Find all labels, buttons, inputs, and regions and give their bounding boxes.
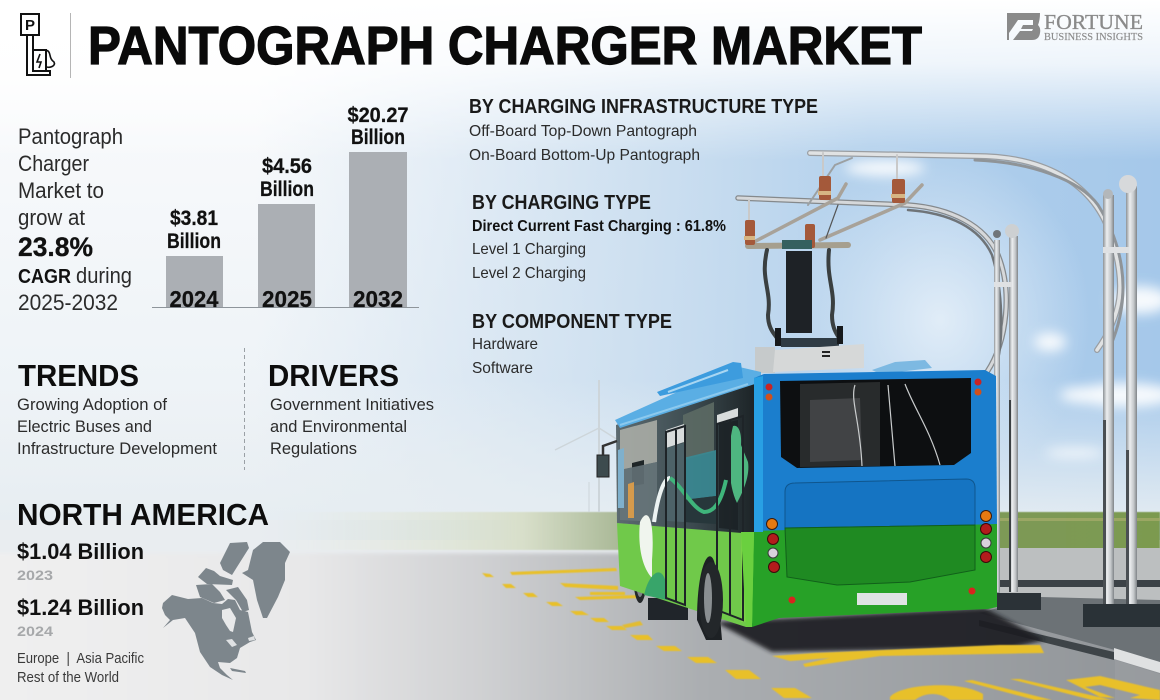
segment: charging infrastructure type: Off-Board Top-Down Pantograph: [469, 123, 697, 140]
tail lights: [766, 378, 992, 604]
title: PANTOGRAPH CHARGER MARKET: [88, 16, 922, 76]
trends: Electric Buses and: [17, 418, 152, 436]
bar chart: market size: Billion: [260, 178, 314, 201]
title divider: [70, 13, 72, 78]
divider: trends and drivers: [244, 348, 246, 470]
bus roof: [615, 362, 761, 428]
icon: parking charger: P: [25, 17, 35, 34]
drivers: DRIVERS: [268, 358, 399, 393]
segment: charging type: [472, 192, 726, 282]
charging station rails: [738, 153, 1123, 372]
text block: CAGR summary: Pantograph: [18, 124, 123, 149]
drivers: and Environmental: [270, 418, 407, 436]
north america stats: 2023: [17, 567, 53, 583]
bus side lower green: [617, 523, 754, 627]
text block: CAGR summary: 2025-2032: [18, 290, 118, 315]
licence plate: [857, 593, 907, 605]
text block: CAGR summary: [18, 124, 132, 315]
bar chart: market size: $20.27: [348, 104, 408, 127]
north america stats: $1.24 Billion: [17, 595, 144, 620]
bus doors: [666, 416, 743, 620]
icon: parking charger: [21, 14, 54, 75]
trends: Growing Adoption of: [17, 396, 167, 414]
text block: CAGR summary: Market to: [18, 178, 104, 203]
bar chart: market size: $3.81: [170, 207, 218, 230]
bus front wheel: [697, 556, 723, 640]
segment: charging type: Direct Current Fast Charging : 61.8%: [472, 218, 726, 235]
drivers: Regulations: [270, 440, 357, 458]
logo: Fortune Business Insights: FORTUNE: [1044, 10, 1143, 34]
bus shadow: [715, 608, 1045, 652]
logo: Fortune Business Insights: [1007, 10, 1143, 43]
text block: CAGR summary: Charger: [18, 151, 89, 176]
drivers: [268, 358, 434, 458]
text block: CAGR summary: during: [76, 263, 132, 288]
north america stats: $1.04 Billion: [17, 539, 144, 564]
text block: CAGR summary: 23.8%: [18, 232, 93, 262]
trends: Infrastructure Development: [17, 440, 217, 458]
wind turbine: [555, 380, 618, 512]
segment: component type: BY COMPONENT TYPE: [472, 311, 672, 333]
segment: charging type: BY CHARGING TYPE: [472, 192, 651, 214]
window reflections: [618, 402, 748, 530]
bus side windows: [616, 378, 756, 533]
rear window: [780, 378, 971, 468]
charging station poles: [993, 175, 1160, 627]
segment: component type: Software: [472, 360, 533, 377]
segment: charging infrastructure type: On-Board Bottom-Up Pantograph: [469, 147, 700, 164]
bar chart: market size: 2032: [353, 286, 403, 312]
bar chart: market size: Billion: [351, 126, 405, 149]
segment: component type: [472, 311, 672, 377]
bus: [597, 362, 997, 640]
north america stats: Rest of the World: [17, 670, 119, 686]
segment: charging infrastructure type: BY CHARGING INFRASTRUCTURE TYPE: [469, 96, 818, 118]
bar chart: market size: 2025: [262, 286, 312, 312]
rear rail arch: [810, 153, 1123, 350]
text block: CAGR summary: grow at: [18, 205, 85, 230]
north america stats: [17, 497, 269, 686]
bus rear face: [741, 370, 997, 627]
north america stats: Europe | Asia Pacific: [17, 651, 144, 667]
segment: charging type: Level 2 Charging: [472, 265, 586, 282]
bar chart: market size: Billion: [167, 230, 221, 253]
pantograph arm assembly: [744, 153, 932, 374]
bar chart: market size: $4.56: [262, 155, 312, 178]
logo: Fortune Business Insights: BUSINESS INSIGHTS: [1044, 32, 1143, 43]
north america stats: 2024: [17, 623, 53, 639]
bar chart: market size: 2024: [170, 286, 219, 312]
bar chart: market size: [152, 104, 419, 312]
segment: charging type: Level 1 Charging: [472, 241, 586, 258]
north america stats: NORTH AMERICA: [17, 497, 269, 532]
segment: component type: Hardware: [472, 336, 538, 353]
map: North America: [162, 542, 290, 680]
front rail arch: [738, 198, 1006, 372]
drivers: Government Initiatives: [270, 396, 434, 414]
bus side graphics: [639, 515, 754, 622]
road markings: [482, 568, 1160, 700]
text block: CAGR summary: CAGR: [18, 266, 71, 288]
segment: charging infrastructure type: [469, 96, 818, 164]
trends: TRENDS: [18, 358, 139, 393]
trends: [17, 358, 217, 458]
rear wheels: [633, 543, 688, 620]
bus mirror: [597, 441, 617, 477]
